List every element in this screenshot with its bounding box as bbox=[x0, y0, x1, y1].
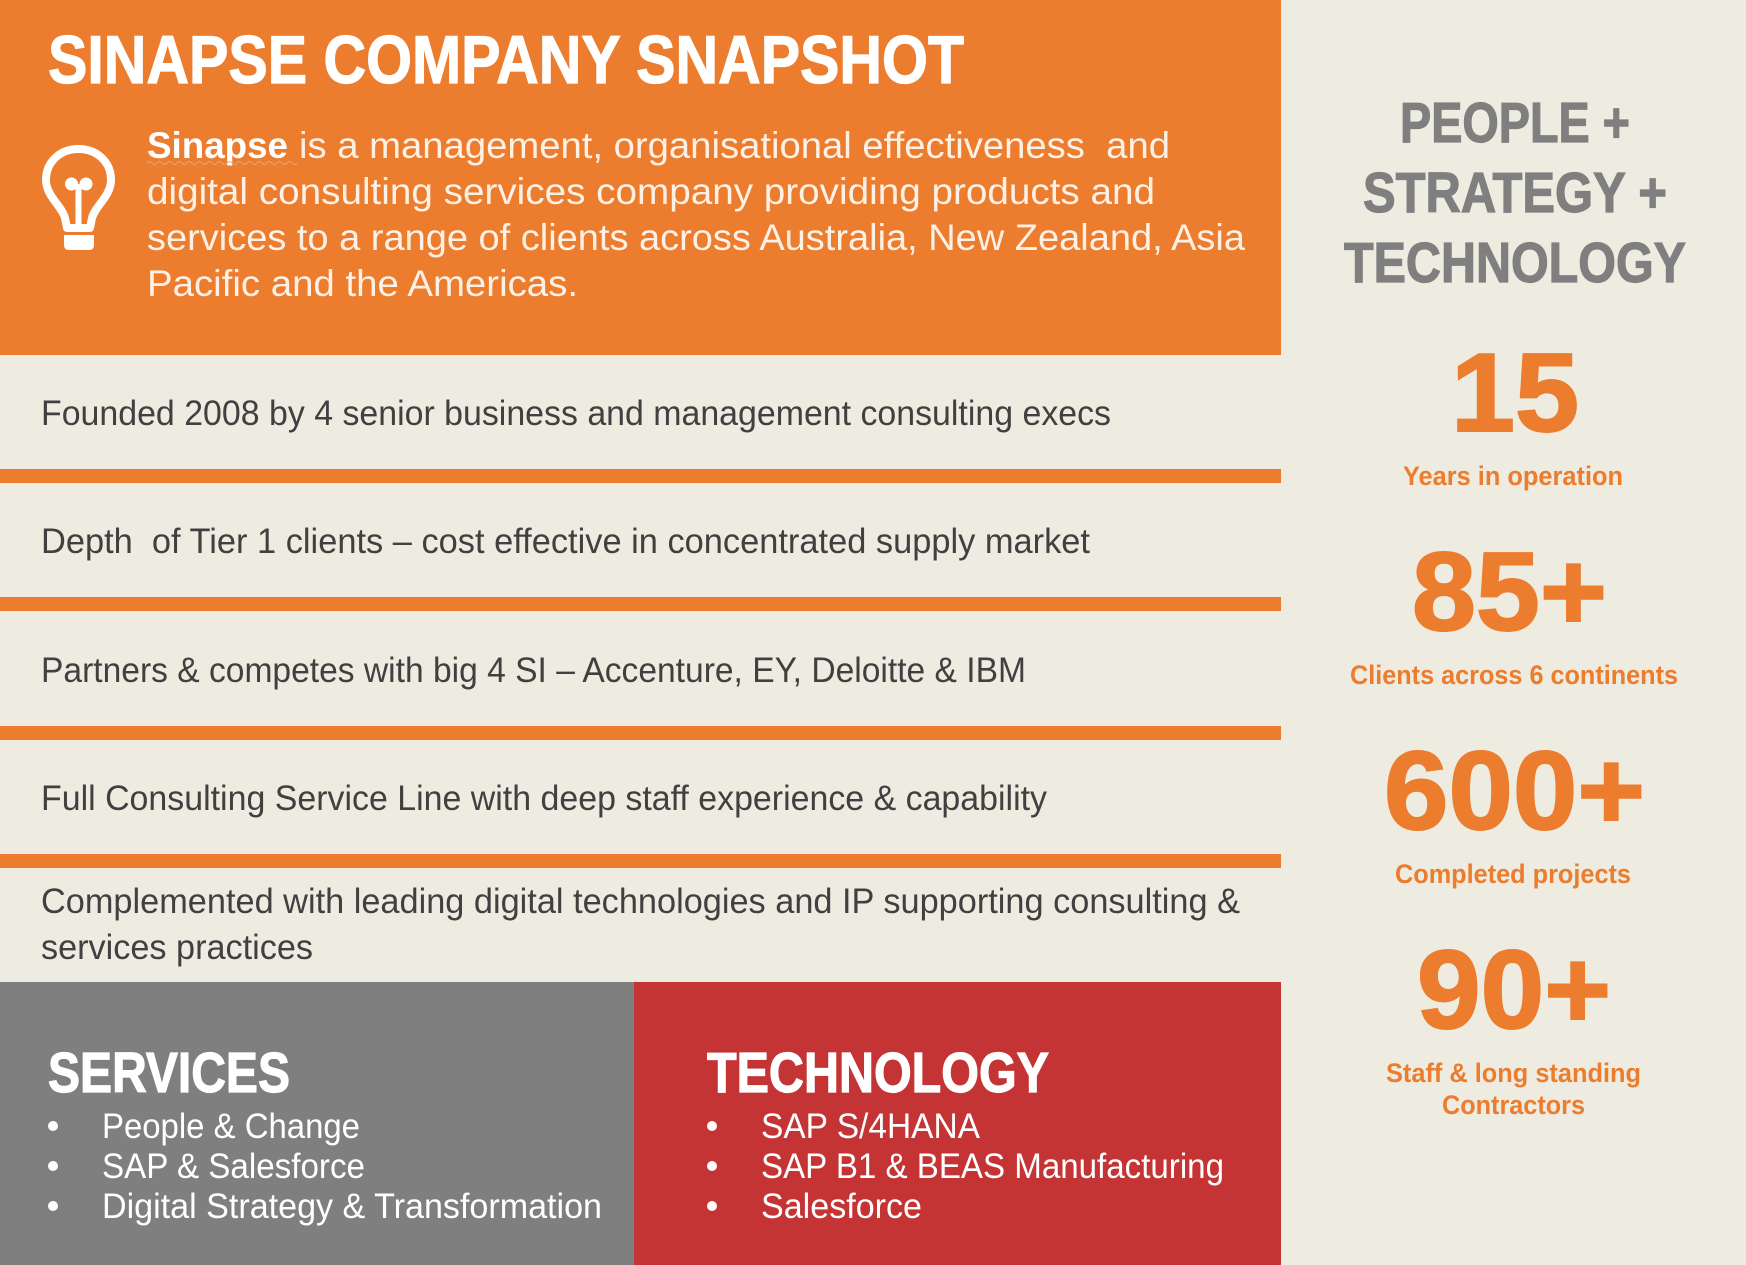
icon: light bulb bbox=[46, 149, 111, 250]
stat: staff and contractors: Staff & long standing bbox=[1386, 1058, 1641, 1088]
list: services: People & Change bbox=[102, 1107, 360, 1146]
heading: people strategy technology: TECHNOLOGY bbox=[1344, 231, 1686, 295]
heading: people strategy technology bbox=[1344, 91, 1686, 295]
fact: partners: Partners & competes with big 4 SI – Accenture, EY, Deloitte & IBM bbox=[41, 651, 1026, 690]
list: services: Digital Strategy & Transformation bbox=[102, 1187, 602, 1226]
stat: years in operation: 15 bbox=[1451, 331, 1579, 455]
intro paragraph bbox=[147, 125, 1245, 304]
list: services bbox=[48, 1107, 602, 1226]
intro paragraph: services to a range of clients across Australia, New Zealand, Asia bbox=[147, 217, 1245, 258]
panel: company intro header bbox=[0, 0, 1281, 355]
fact: clients: Depth of Tier 1 clients – cost effective in concentrated supply market bbox=[41, 522, 1090, 561]
list: technology: SAP S/4HANA bbox=[761, 1107, 981, 1146]
list: technology: Salesforce bbox=[761, 1187, 922, 1226]
heading: technology: TECHNOLOGY bbox=[707, 1041, 1049, 1105]
intro paragraph: Sinapse bbox=[147, 125, 288, 166]
fact: digital technologies: Complemented with leading digital technologies and IP supporting consulting & bbox=[41, 882, 1240, 921]
stat: years in operation bbox=[1403, 331, 1623, 491]
intro paragraph: Pacific and the Americas. bbox=[147, 263, 578, 304]
stat: staff and contractors: Contractors bbox=[1442, 1090, 1585, 1120]
stat: staff and contractors bbox=[1386, 928, 1641, 1120]
stat: clients: 85+ bbox=[1412, 530, 1607, 654]
stat: clients: Clients across 6 continents bbox=[1350, 660, 1678, 690]
intro paragraph: digital consulting services company providing products and bbox=[147, 171, 1155, 212]
stat: completed projects: Completed projects bbox=[1395, 859, 1631, 889]
stat: staff and contractors: 90+ bbox=[1417, 928, 1611, 1052]
fact: service line: Full Consulting Service Line with deep staff experience & capability bbox=[41, 779, 1047, 818]
panel: services bbox=[0, 982, 634, 1265]
list: technology: SAP B1 & BEAS Manufacturing bbox=[761, 1147, 1224, 1186]
stat: years in operation: Years in operation bbox=[1403, 461, 1623, 491]
fact: founded: Founded 2008 by 4 senior business and management consulting execs bbox=[41, 394, 1111, 433]
fact: digital technologies bbox=[41, 882, 1240, 967]
heading: people strategy technology: PEOPLE + bbox=[1400, 91, 1630, 155]
title: SINAPSE COMPANY SNAPSHOT bbox=[48, 22, 964, 98]
panel: statistics sidebar bbox=[1281, 0, 1746, 1265]
stat: completed projects: 600+ bbox=[1384, 729, 1645, 853]
heading: people strategy technology: STRATEGY + bbox=[1363, 161, 1667, 225]
list: technology bbox=[707, 1107, 1224, 1226]
intro paragraph: is a management, organisational effectiveness and bbox=[299, 125, 1170, 166]
panel: key facts list bbox=[0, 355, 1281, 982]
heading: services: SERVICES bbox=[48, 1041, 290, 1105]
fact: digital technologies: services practices bbox=[41, 928, 313, 967]
panel: technology bbox=[634, 982, 1281, 1265]
stat: clients bbox=[1350, 530, 1678, 690]
list: services: SAP & Salesforce bbox=[102, 1147, 365, 1186]
